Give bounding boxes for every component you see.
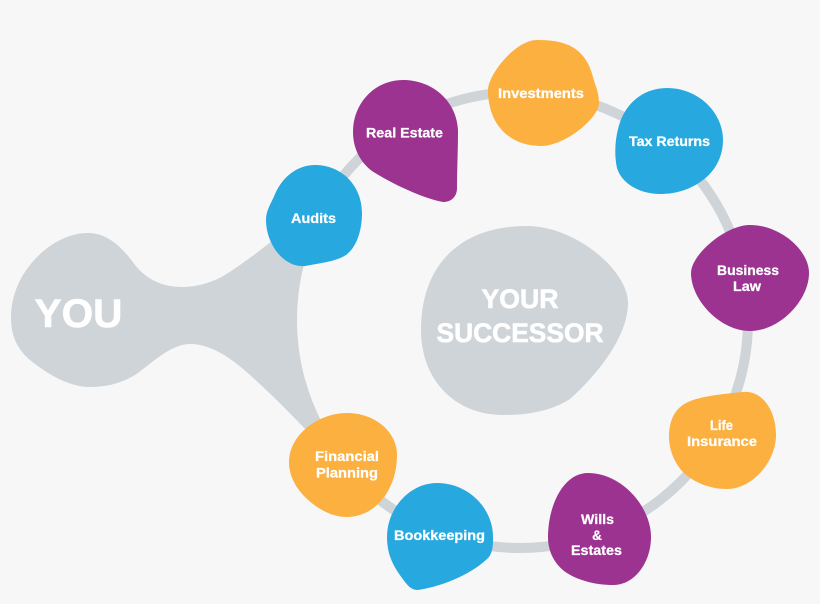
service: life insurance [669,392,776,489]
service: investments [488,40,599,146]
service: financial planning: Planning [316,466,378,480]
service: financial planning [289,413,397,517]
blob: your successor [421,226,628,415]
service: wills and estates: & [592,528,602,543]
service: audits: Audits [291,211,336,226]
service: wills and estates [548,473,651,585]
service: wills and estates: Estates [571,543,622,558]
ring connecting the services [292,92,748,548]
service: audits [266,165,362,266]
blob: you [11,233,320,431]
service: bookkeeping [387,483,493,590]
service: tax returns [615,88,723,194]
service: investments: Investments [498,86,584,101]
service: real estate: Real Estate [366,126,444,140]
service: wills and estates: Wills [581,512,614,527]
service: business law [691,225,809,331]
text: your successor: YOUR [482,284,558,314]
service: business law: Law [733,279,762,294]
service: tax returns: Tax Returns [629,134,710,149]
service: life insurance: Insurance [687,434,758,449]
text: you: YOU [34,292,122,336]
service: business law: Business [717,263,779,278]
service: life insurance: Life [710,418,733,433]
service: financial planning: Financial [315,449,379,464]
service: bookkeeping: Bookkeeping [394,528,485,543]
service: real estate [353,80,458,202]
text: your successor: SUCCESSOR [436,318,604,348]
